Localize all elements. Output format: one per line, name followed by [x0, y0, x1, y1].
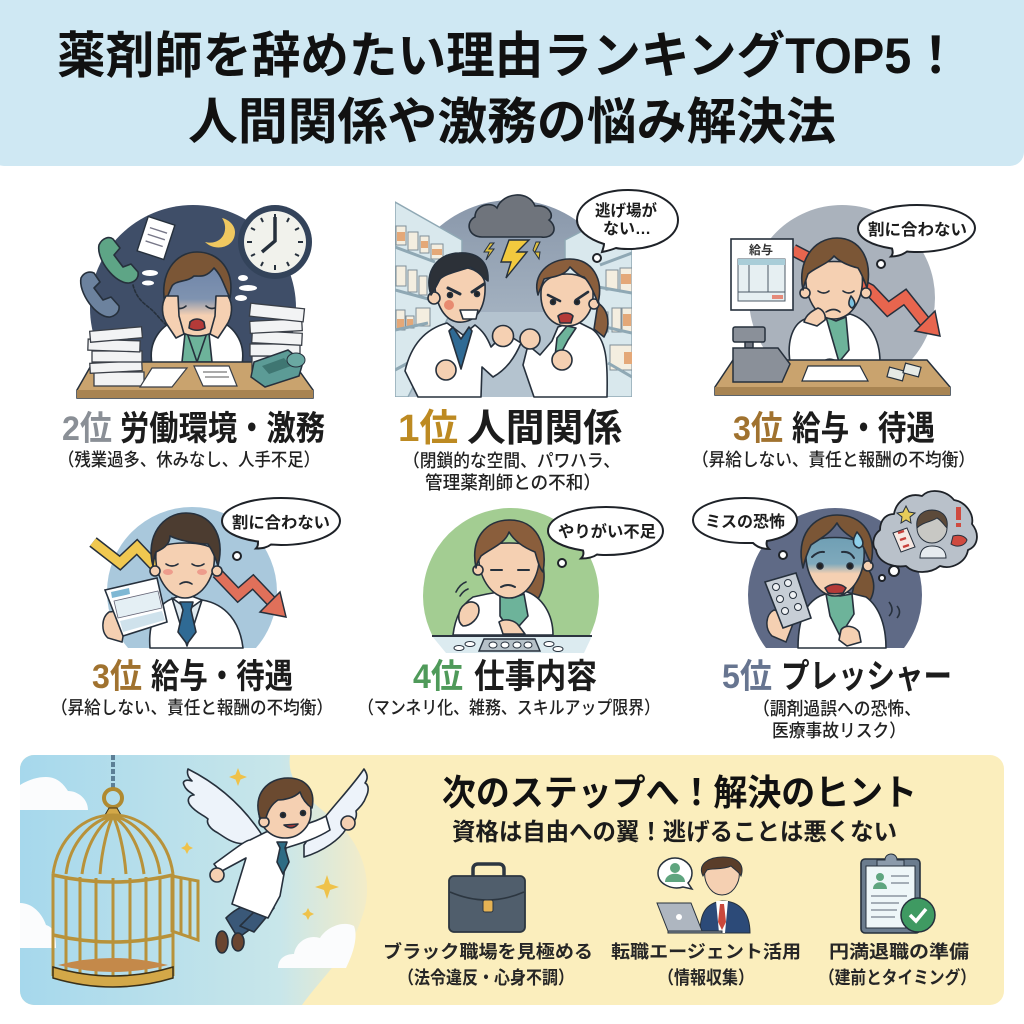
icon: payslip	[731, 239, 793, 310]
hint: black workplace: （法令違反・心身不調）	[398, 968, 574, 988]
heading: 給与・待遇	[151, 658, 293, 696]
heading: プレッシャー	[781, 658, 952, 696]
illustration: discouraged pharmacist at register	[715, 205, 950, 395]
icon: blister pack	[765, 573, 811, 642]
icon: yellow zigzag line	[93, 542, 155, 566]
pharmacist	[798, 515, 886, 648]
heading rank 1: 人間関係	[467, 408, 622, 450]
pharmacy background	[395, 200, 632, 397]
man pharmacist	[405, 253, 521, 397]
panel: rank 5 pressure	[693, 491, 977, 741]
description	[753, 699, 921, 741]
heading rank 1: 1位	[398, 408, 458, 450]
description rank 1: （閉鎖的な空間、パワハラ、	[403, 451, 620, 471]
heading rank 3: 3位	[733, 410, 783, 448]
description rank 1	[403, 451, 620, 493]
description rank 1: 管理薬剤師との不和）	[425, 473, 601, 493]
panel: next step hints	[20, 755, 1004, 1005]
speech bubble	[548, 507, 663, 567]
hint: black workplace	[383, 864, 593, 988]
heading	[413, 658, 597, 696]
speech bubble	[693, 498, 797, 559]
icon: pay document	[103, 578, 167, 642]
hint: resignation preparation: 円満退職の準備	[829, 941, 969, 962]
panel: rank 3 salary top	[692, 205, 975, 470]
speech bubble: 逃げ場が	[595, 201, 657, 220]
icon: crescent moon	[205, 218, 235, 247]
paper stacks	[88, 303, 304, 386]
illustration: overworked pharmacist	[77, 205, 313, 411]
illustration: anxious pharmacist	[748, 508, 922, 649]
icon: wall clock	[238, 205, 312, 279]
pharmacist	[150, 513, 243, 648]
illustration: arguing pharmacists	[395, 189, 679, 398]
icon: clipboard with check	[861, 854, 935, 933]
panel: rank 1 human relations	[395, 190, 678, 493]
speech bubble: ミスの恐怖	[705, 512, 785, 531]
heading rank 2: 労働環境・激務	[120, 410, 325, 448]
panel: rank 3 salary bottom	[51, 498, 340, 718]
cash register	[733, 327, 790, 382]
heading	[722, 658, 952, 696]
pharmacist	[453, 520, 553, 635]
icon: red falling arrow	[217, 573, 286, 617]
speech bubble: 割に合わない	[868, 221, 967, 239]
hint: resignation preparation	[819, 854, 976, 988]
desk	[77, 362, 313, 398]
hint: black workplace: ブラック職場を見極める	[383, 941, 593, 962]
icon: payslip: 給与	[749, 242, 773, 257]
description rank 3: （昇給しない、責任と報酬の不均衡）	[692, 450, 975, 470]
counter line	[432, 635, 592, 637]
speech bubble	[577, 190, 678, 262]
heading: 3位	[92, 658, 142, 696]
panel: rank 4 job content	[358, 507, 663, 718]
title banner	[0, 0, 1024, 166]
description rank 2: （残業過多、休みなし、人手不足）	[58, 449, 320, 470]
wings	[183, 769, 264, 844]
pill tray	[454, 639, 563, 652]
desk	[715, 360, 950, 395]
icon: desk phone	[251, 350, 305, 387]
pharmacist	[789, 238, 880, 374]
illustration: pharmacist with wings	[181, 768, 368, 953]
description: （マンネリ化、雑務、スキルアップ限界）	[358, 698, 660, 718]
hint: resignation preparation: （建前とタイミング）	[819, 967, 976, 988]
illustration: pharmacist with pay chart	[89, 507, 287, 649]
pharmacist	[151, 252, 243, 364]
heading: 5位	[722, 658, 772, 696]
thought bubble	[873, 491, 977, 581]
description: （調剤過誤への恐怖、	[753, 699, 921, 719]
sparkles	[181, 768, 339, 920]
cash	[887, 363, 921, 381]
heading rank 3: 給与・待遇	[792, 410, 935, 448]
icon: agent with laptop	[657, 857, 750, 933]
subheading: 資格は自由への翼！逃げることは悪くない	[452, 819, 897, 846]
hint: job agent: 転職エージェント活用	[611, 942, 801, 962]
hint: job agent	[611, 857, 801, 988]
heading	[92, 658, 293, 696]
panel: rank 2 working conditions	[58, 205, 325, 470]
hint: job agent: （情報収集）	[658, 968, 754, 988]
desk papers	[140, 366, 237, 387]
panel background	[20, 755, 1004, 1005]
cage door	[172, 876, 198, 940]
speech bubble: 割に合わない	[232, 514, 330, 532]
desk paper	[802, 366, 868, 381]
icon: sweat marks	[142, 270, 257, 301]
heading rank 2	[62, 410, 325, 448]
cage base	[53, 967, 173, 987]
speech bubble	[222, 498, 340, 560]
speech bubble: ない…	[603, 220, 651, 238]
heading: 仕事内容	[474, 658, 597, 696]
heading rank 3	[733, 410, 935, 448]
icon: floating document	[137, 217, 175, 259]
title line 1: 薬剤師を辞めたい理由ランキングTOP5！	[57, 28, 960, 84]
heading: next step: 次のステップへ！解決のヒント	[442, 772, 917, 813]
heading rank 1	[398, 408, 622, 450]
heading rank 2: 2位	[62, 410, 112, 448]
icon: storm cloud	[469, 195, 554, 278]
speech bubble	[858, 205, 975, 268]
icon: briefcase	[449, 864, 525, 932]
description: （昇給しない、責任と報酬の不均衡）	[51, 698, 333, 718]
heading: 4位	[413, 658, 463, 696]
woman pharmacist	[520, 259, 608, 397]
icon: telephone receivers	[81, 238, 169, 327]
title line 2: 人間関係や激務の悩み解決法	[188, 94, 836, 150]
illustration: birdcage	[53, 755, 198, 987]
illustration: pharmacist counting pills	[423, 508, 599, 653]
icon: falling arrow	[793, 250, 940, 336]
description: 医療事故リスク）	[772, 721, 906, 741]
pale counter	[432, 636, 592, 653]
speech bubble: やりがい不足	[558, 522, 656, 541]
pharmacist	[210, 778, 355, 953]
